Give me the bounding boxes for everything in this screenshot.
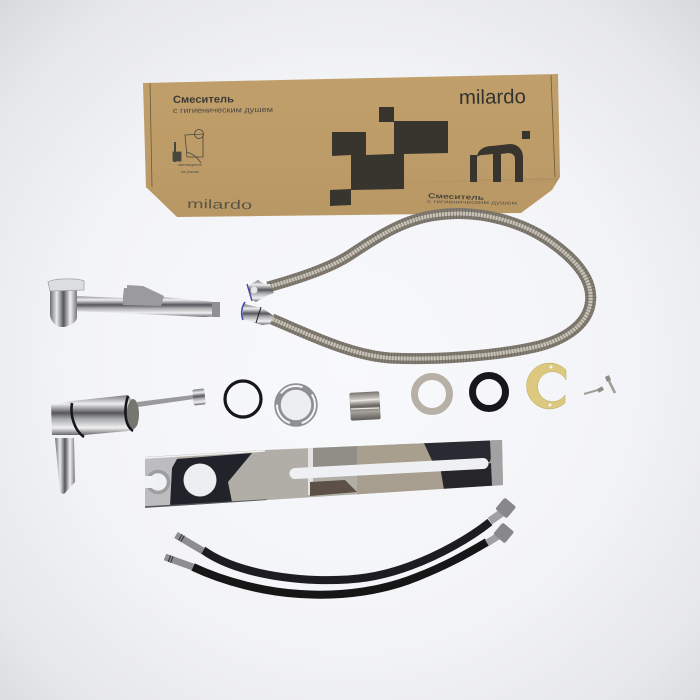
shower head body (50, 289, 77, 327)
bracket bottom edge (145, 500, 267, 507)
chrome ring (277, 386, 315, 424)
box top face (143, 74, 560, 188)
upper hose (176, 497, 516, 580)
mixer lever (55, 438, 75, 494)
installation icon (173, 130, 204, 163)
mounting bracket (145, 440, 503, 508)
hose fitting top (247, 280, 274, 302)
lower face subheading: с гигиеническим душем (427, 199, 518, 207)
rubber washer (472, 376, 506, 408)
mixer o-rings (72, 396, 133, 437)
bracket left silver end (145, 455, 177, 508)
metal sleeve (349, 391, 381, 421)
black supply hoses (165, 497, 516, 595)
box subheading: с гигиеническим душем (173, 105, 273, 115)
shower head cap (48, 279, 84, 291)
bracket mid bright strip (308, 445, 313, 495)
shower tube (74, 295, 220, 317)
mixer body (51, 388, 206, 494)
bracket right upper dark (424, 440, 495, 462)
bracket hook cut-out (143, 472, 168, 492)
bracket lower warm sheen (357, 471, 444, 494)
mixer dark end (127, 399, 139, 429)
bracket slot (290, 458, 488, 479)
bracket round hole (184, 464, 216, 496)
mixer stem cap (192, 388, 206, 406)
bracket top highlight (145, 451, 265, 458)
cardboard box (143, 74, 560, 217)
shower nozzle end (212, 302, 220, 317)
bracket right lower dark (440, 463, 497, 490)
bracket base metal (146, 440, 503, 508)
shower trigger (123, 285, 164, 306)
big m mark (470, 144, 523, 182)
hand shower (48, 279, 220, 327)
black pixel graphic (330, 107, 448, 206)
bracket right edge (490, 440, 504, 486)
hose fitting bottom (242, 302, 274, 325)
mixer cylinder (51, 395, 138, 435)
lower face logo: milardo (187, 197, 252, 212)
bracket upper sheen (313, 446, 357, 467)
screws (584, 376, 615, 394)
black o-ring (225, 381, 261, 417)
lower hose (165, 522, 514, 595)
flexible metal shower hose (242, 214, 591, 359)
bracket dark reflection (170, 453, 252, 506)
brand logo: milardo (459, 86, 526, 109)
bracket warm sheen (357, 443, 432, 464)
box heading: Смеситель (173, 93, 235, 106)
m mark square (522, 131, 530, 139)
installation caption: монтируется (178, 162, 202, 167)
bracket lower reflection (310, 480, 357, 496)
mixer stem (137, 395, 194, 407)
box flap lines (150, 75, 555, 187)
brass c-clip (526, 363, 566, 409)
fibre washer (414, 376, 450, 412)
installation caption line two: на унитаз (181, 169, 199, 174)
lower face heading: Смеситель (428, 193, 485, 202)
box lower face (146, 177, 560, 217)
